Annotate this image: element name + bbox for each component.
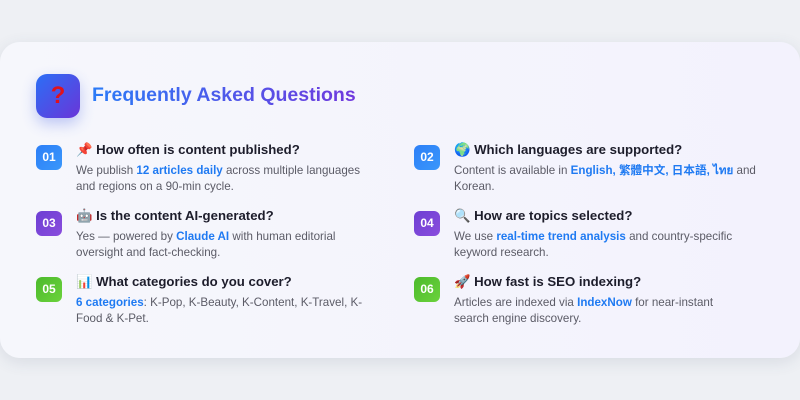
text: 03 [42, 216, 56, 230]
faq 04 [414, 208, 732, 259]
icon: question mark: ? [51, 82, 65, 109]
faq 05 [36, 274, 362, 325]
text: 04 [420, 216, 434, 230]
text: 01 [42, 150, 56, 164]
text: 02 [420, 150, 434, 164]
faq 01 [36, 142, 360, 193]
icon: question mark [36, 74, 80, 118]
faq 03 [36, 208, 336, 259]
text: 6 categories: K-Pop, K-Beauty, K-Content, K-Travel, K-Food & K-Pet. [76, 296, 362, 325]
text: 📌 How often is content published? [76, 142, 300, 157]
faq 02 [414, 142, 756, 193]
text: Articles are indexed via IndexNow for near-instant search engine discovery. [454, 296, 713, 325]
card panel [0, 42, 800, 358]
text: We use real-time trend analysis and country-specific keyword research. [454, 230, 732, 259]
text: Content is available in English, 繁體中文, 日本語, ไทย and Korean. [454, 164, 756, 193]
faq 06 [414, 274, 713, 325]
text: 🔍 How are topics selected? [454, 208, 632, 223]
text: 🚀 How fast is SEO indexing? [454, 274, 641, 289]
text: 📊 What categories do you cover? [76, 274, 292, 289]
title: Frequently Asked Questions [92, 84, 356, 106]
text: 06 [420, 282, 434, 296]
text: 05 [42, 282, 56, 296]
text: Yes — powered by Claude AI with human editorial oversight and fact-checking. [76, 230, 336, 259]
text: 🌍 Which languages are supported? [454, 142, 682, 157]
text: 🤖 Is the content AI-generated? [76, 208, 274, 223]
text: We publish 12 articles daily across multiple languages and regions on a 90-min cycle. [76, 164, 360, 193]
